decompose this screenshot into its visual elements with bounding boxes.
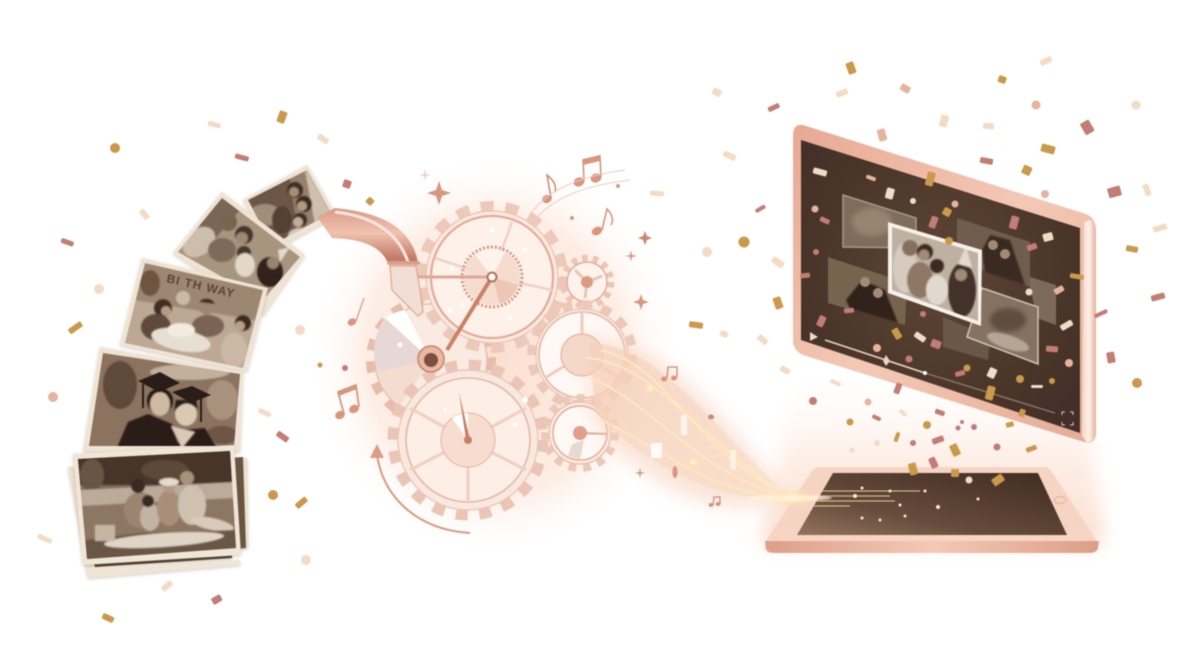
screen photo collage: [828, 195, 1056, 364]
pipe funnel: [317, 208, 423, 316]
note: stream double bottom: [708, 497, 720, 507]
tablet: [748, 467, 1099, 553]
note: left single: [346, 298, 364, 327]
music notes and stars: [334, 155, 720, 507]
light stream from gears to tablet: [585, 340, 792, 507]
confetti: over monitor screen: [800, 167, 1084, 487]
collage: lower middle photo: [943, 317, 990, 360]
collage: lower right photo: [967, 288, 1038, 364]
background glow behind gears: [310, 155, 680, 555]
back photos of the stack: [68, 457, 248, 578]
tablet glow: [768, 488, 816, 508]
gear: left translucent: [371, 300, 491, 420]
gear: big bottom: [393, 365, 543, 515]
collage: lower left photo: [828, 257, 907, 325]
note: top single: [541, 175, 556, 205]
collage: top right photo: [957, 218, 1030, 287]
note: stream double top: [661, 367, 677, 382]
circular arrow: [370, 444, 470, 533]
monitor: [793, 125, 1096, 443]
gear: lower right: [545, 398, 615, 468]
confetti: around monitor: [650, 56, 1168, 388]
collage: top left photo: [843, 195, 916, 248]
rose gold ball joint: [418, 346, 444, 372]
monitor frame: [793, 125, 1096, 443]
gear: large top: [416, 207, 562, 350]
stars: [419, 169, 652, 478]
photo: birthday party: [120, 258, 268, 372]
banner text: BI TH WAY: [165, 271, 237, 301]
gear arms: [416, 277, 492, 350]
player controls: [810, 332, 1073, 425]
photo: two graduates: [83, 347, 243, 452]
confetti: left side: [37, 110, 375, 623]
note: stream small: [672, 414, 714, 478]
note: top double: [572, 155, 603, 188]
collage: main framed photo: [888, 222, 982, 326]
collage: far right photo: [1030, 277, 1056, 325]
gear: small top right: [563, 258, 611, 306]
photo: family picnic: [73, 445, 241, 565]
gear: right medium: [532, 305, 632, 405]
projection glow between tablet and monitor: [760, 360, 1105, 545]
photo: three family faces: [242, 164, 334, 244]
staff lines: [530, 170, 630, 220]
gears mechanism: [371, 207, 632, 515]
tablet light streaks: [800, 486, 980, 522]
graduation caps: [138, 372, 211, 422]
photo stack flowing into the pipe: [68, 165, 337, 578]
sparkles on gears: [398, 228, 528, 427]
photo: grandparents with child: [173, 192, 305, 316]
note: left double: [334, 384, 360, 421]
note: right single: [590, 209, 612, 237]
